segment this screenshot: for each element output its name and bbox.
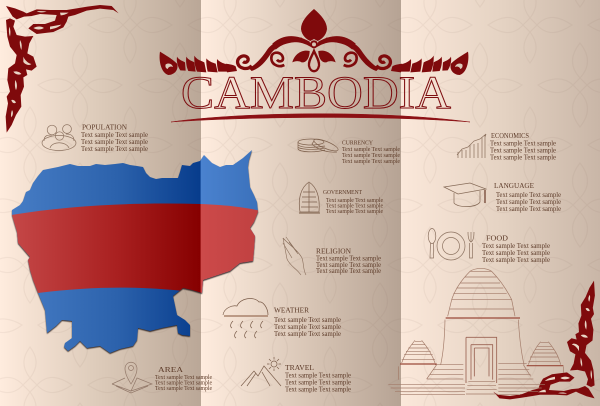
block: area: Text sample Text sample (155, 374, 212, 381)
block: currency (298, 137, 400, 165)
block: area: AREA (158, 365, 184, 374)
block: food: Text sample Text sample (482, 243, 550, 250)
block: language: Text sample Text sample (496, 199, 561, 206)
block: economics: ECONOMICS (491, 133, 529, 140)
corner ornament: top left (6, 5, 119, 133)
block: weather (223, 299, 341, 338)
block: weather: Text sample Text sample (274, 317, 341, 324)
block: area: Text sample Text sample (155, 380, 212, 386)
block: food (428, 228, 550, 264)
title: CAMBODIA: CAMBODIA (181, 67, 451, 119)
block: weather: Text sample Text sample (274, 331, 341, 338)
icon: coins (298, 137, 339, 153)
block: area: Text sample Text sample (155, 385, 212, 392)
icon: praying hands (283, 237, 306, 275)
block: religion: Text sample Text sample (316, 268, 381, 275)
block: language: LANGUAGE (494, 182, 534, 190)
block: language: Text sample Text sample (496, 192, 561, 199)
block: government: Text sample Text sample (326, 209, 383, 215)
block: economics (457, 133, 556, 162)
block: population: POPULATION (82, 122, 128, 132)
icon: government building (299, 182, 320, 213)
icon: map pin (112, 362, 152, 393)
illustration: Khmer temple (388, 268, 563, 395)
block: currency: Text sample Text sample (342, 152, 400, 159)
block: weather: Text sample Text sample (274, 324, 341, 331)
block: religion: RELIGION (316, 246, 352, 256)
block: currency: CURRENCY (342, 140, 373, 146)
block: area (112, 362, 212, 393)
block: travel: Text sample Text sample (285, 380, 351, 386)
icon: rising chart (457, 134, 486, 158)
icon: plate with spoon and fork (428, 228, 474, 260)
icon: cloud and rain (223, 299, 268, 338)
icon: people (42, 125, 76, 150)
panel: centre fold (201, 0, 401, 406)
map of Cambodia in flag colours (11, 150, 259, 354)
block: religion (283, 237, 381, 275)
icon: graduation cap (444, 183, 486, 207)
block: travel: Text sample Text sample (285, 372, 351, 380)
block: economics: Text sample Text sample (490, 154, 556, 162)
block: food: Text sample Text sample (482, 250, 550, 257)
block: religion: Text sample Text sample (316, 262, 381, 269)
block: travel: Text sample Text sample (285, 386, 351, 394)
panel: left fold (0, 0, 201, 406)
block: government: Text sample Text sample (326, 204, 383, 210)
corner ornament: bottom right (493, 281, 595, 399)
block: population (42, 122, 148, 153)
block: population: Text sample Text sample (81, 146, 148, 153)
block: economics: Text sample Text sample (490, 148, 556, 154)
block: government (299, 182, 383, 215)
block: food: FOOD (486, 234, 509, 242)
block: food: Text sample Text sample (482, 257, 550, 264)
block: weather: WEATHER (274, 306, 309, 314)
block: language (444, 182, 561, 213)
title ornament crown (160, 9, 468, 75)
block: religion: Text sample Text sample (316, 256, 381, 262)
icon: mountains and sun (241, 357, 281, 386)
block: government: GOVERNMENT (323, 189, 362, 196)
block: currency: Text sample Text sample (342, 146, 400, 153)
block: population: Text sample Text sample (81, 139, 148, 146)
block: language: Text sample Text sample (496, 206, 561, 213)
block: travel (241, 357, 351, 394)
block: population: Text sample Text sample (81, 132, 148, 139)
panel: right fold (401, 0, 600, 406)
block: currency: Text sample Text sample (342, 158, 400, 165)
block: economics: Text sample Text sample (490, 140, 556, 148)
block: government: Text sample Text sample (326, 198, 383, 204)
block: travel: TRAVEL (285, 364, 314, 372)
title underline swoosh (171, 114, 470, 122)
